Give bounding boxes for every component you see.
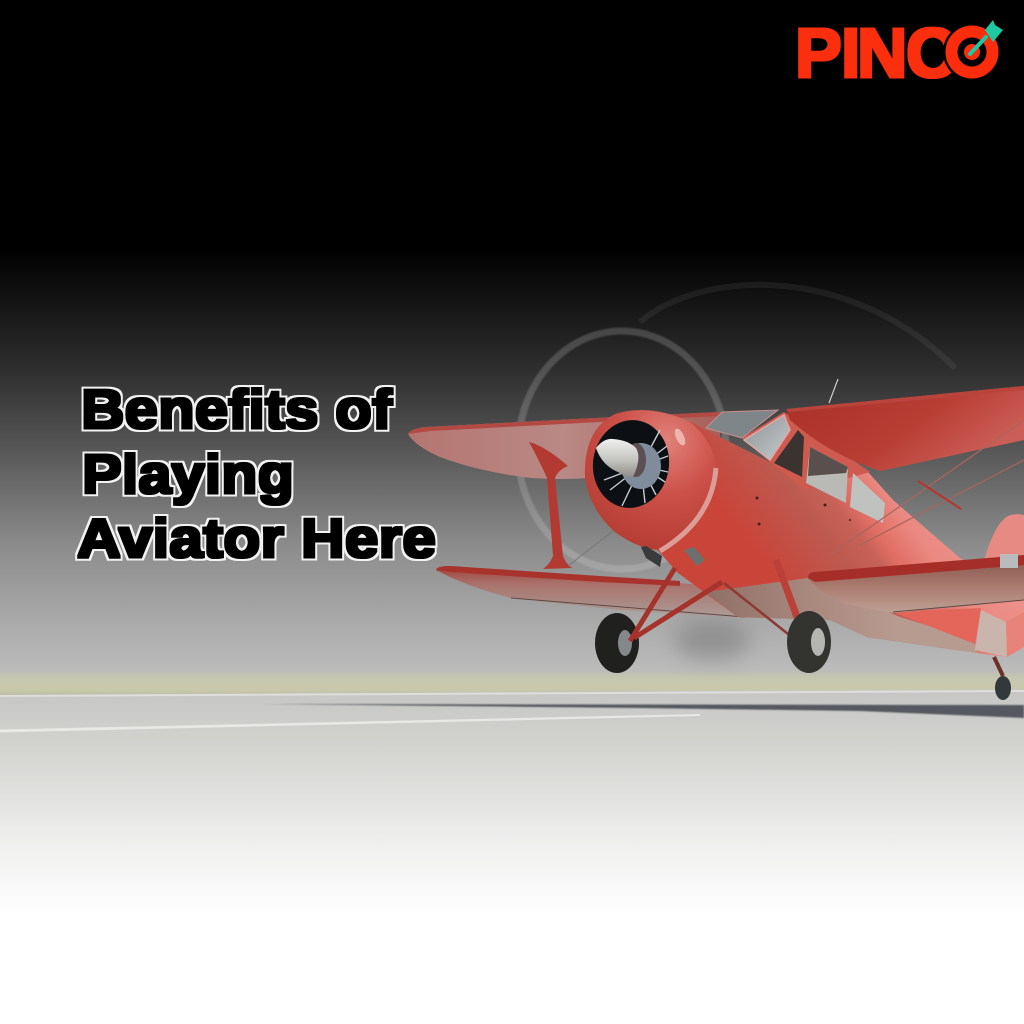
lower wing leading edge <box>436 566 680 586</box>
left hub <box>618 630 632 656</box>
cabin roof block <box>742 412 870 490</box>
runway centre line <box>0 714 700 732</box>
logo: PINCO <box>795 14 1003 92</box>
fuselage rivets <box>697 489 851 526</box>
lower wing right trailing line <box>893 600 1024 612</box>
spinner nose <box>596 439 638 477</box>
upper wing left <box>408 412 720 479</box>
fuselage belly shading <box>705 578 977 653</box>
propeller motion rings <box>518 285 955 569</box>
logo target centre <box>964 44 980 60</box>
cabin side window <box>806 447 848 503</box>
left main gear <box>595 568 722 673</box>
fuselage orange belly patch <box>893 608 981 644</box>
windshield side <box>744 415 790 460</box>
heading line 3: Aviator Here <box>77 507 436 569</box>
red brace <box>918 481 961 509</box>
strut wire <box>568 524 622 566</box>
tail fin <box>984 514 1024 600</box>
lower wing right leading edge <box>808 555 1024 582</box>
right gear struts <box>776 560 797 617</box>
engine cylinders <box>604 430 668 506</box>
outer propeller arc <box>640 285 955 368</box>
engine hub collar <box>626 443 646 477</box>
left tyre <box>595 613 639 673</box>
right tyre <box>787 611 831 673</box>
exhaust smoke <box>674 620 750 660</box>
windshield top <box>706 410 778 438</box>
horizon grass strip <box>0 671 1024 695</box>
fuselage tail cone <box>1006 612 1024 657</box>
cabin rear window <box>850 473 885 523</box>
engine opening <box>587 415 675 513</box>
background: dark sky gradient <box>0 0 1024 680</box>
heading <box>77 378 436 569</box>
right hub <box>811 628 825 656</box>
tail gear <box>994 657 1011 700</box>
wing bracing wires <box>830 420 1024 555</box>
right gear brace <box>724 583 788 634</box>
logo target backing <box>943 23 1001 81</box>
plane shadow on runway <box>262 704 1024 718</box>
right main wheel <box>787 611 831 673</box>
cowling rear band <box>660 468 716 551</box>
exhaust pipes <box>641 546 705 567</box>
dark door window <box>774 430 804 477</box>
cabin side window interior <box>808 447 848 476</box>
heading line 1: Benefits of <box>81 378 393 440</box>
lower wing right <box>808 556 1024 613</box>
lower wing left <box>436 566 760 618</box>
wing strut clamp <box>1000 554 1018 568</box>
biplane <box>408 379 1024 700</box>
upper wing right <box>786 386 1024 471</box>
upper wing leading edge <box>408 412 720 434</box>
runway fading to white <box>0 689 1024 1024</box>
engine hub <box>621 443 661 489</box>
runway edge line <box>0 690 1024 697</box>
upper wing highlight edge <box>786 386 1024 412</box>
inner propeller ring <box>518 331 726 569</box>
cowling <box>585 410 717 550</box>
logo wordmark: PINCO <box>795 14 1000 92</box>
left gear struts <box>630 568 722 641</box>
heading line 2: Playing <box>82 443 294 505</box>
cowling highlight <box>673 427 687 447</box>
logo arrow <box>970 20 1003 54</box>
fuselage rear panel <box>975 610 1007 657</box>
lower wing trailing hardware <box>511 598 745 617</box>
antenna <box>829 379 838 403</box>
wing strut <box>529 442 572 569</box>
fuselage <box>655 412 1024 657</box>
logo target ring <box>952 32 992 72</box>
